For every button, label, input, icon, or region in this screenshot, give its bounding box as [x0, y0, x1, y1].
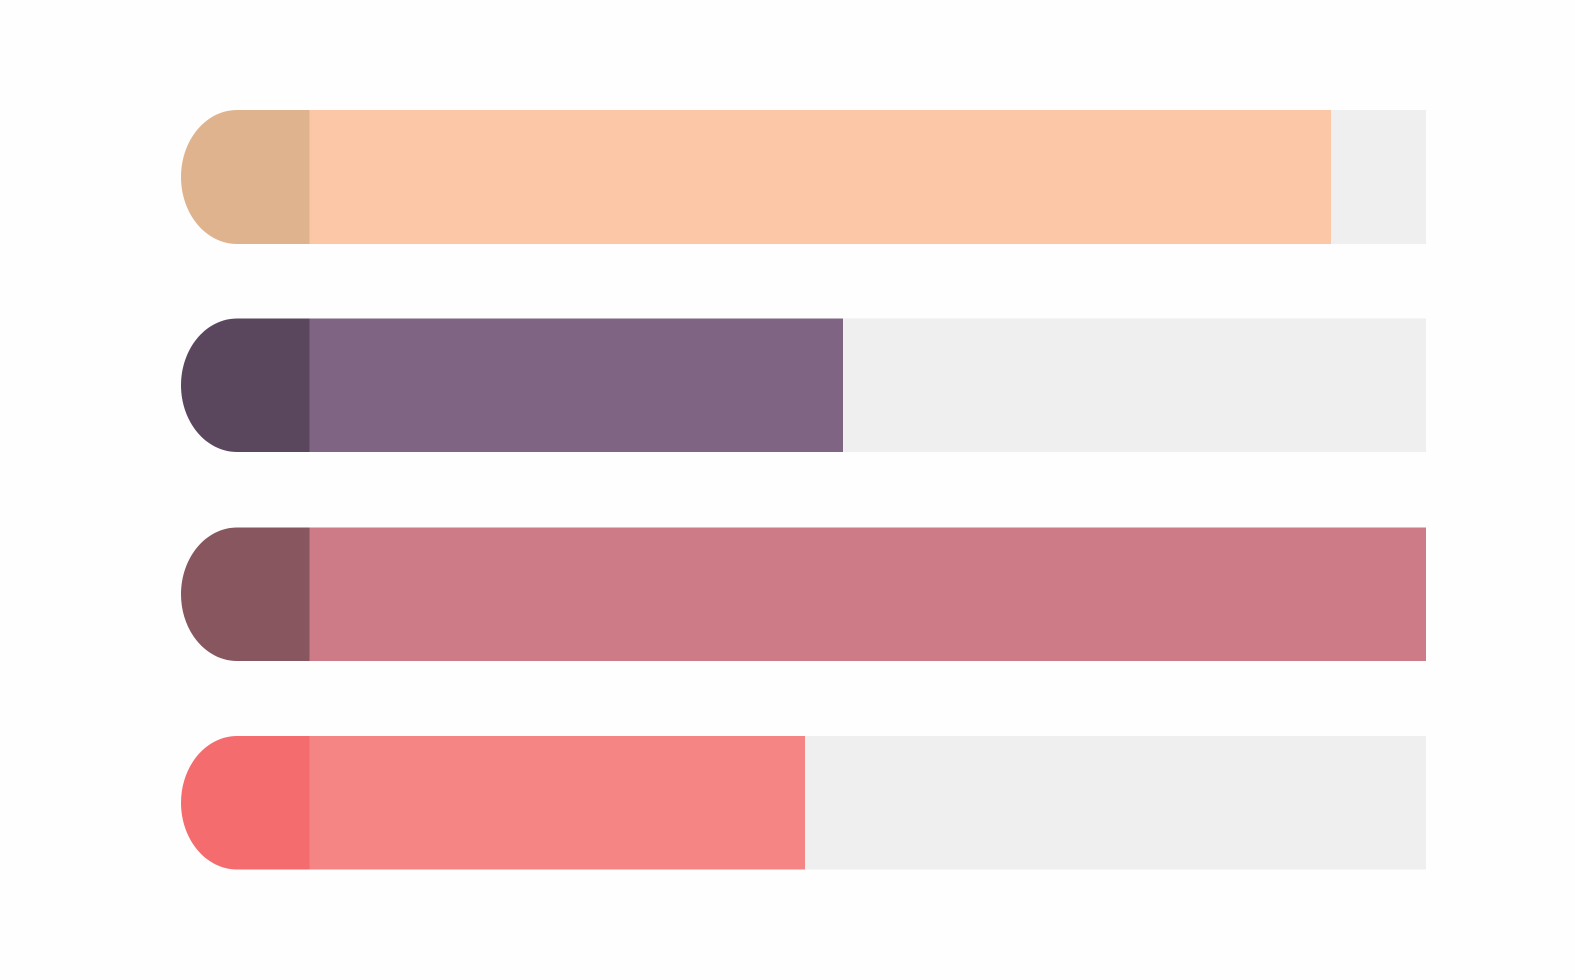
bar 1: peach: [181, 110, 1426, 244]
bar 4: coral: [181, 736, 1426, 870]
bar 2: purple: [181, 318, 1426, 452]
bar 3: rose: [181, 528, 1426, 661]
